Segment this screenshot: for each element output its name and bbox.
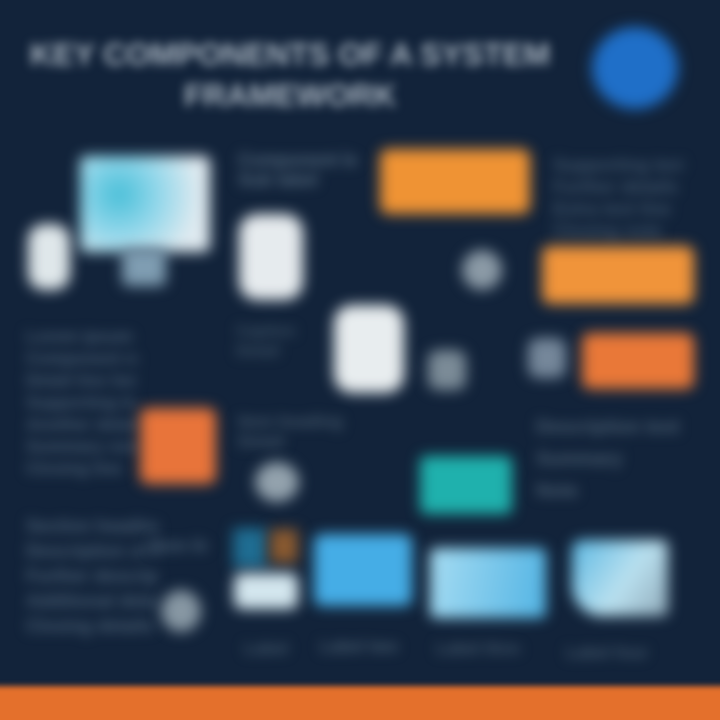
footer bar	[0, 686, 720, 720]
icon: white rounded device one	[239, 214, 303, 300]
small icon: grey dot four	[255, 462, 299, 502]
title	[24, 36, 556, 113]
caption one: Label	[244, 639, 288, 658]
text block: upper left: Another detail	[26, 415, 138, 434]
text block: lower left	[24, 516, 159, 638]
small icon: grey dot three	[528, 338, 566, 378]
small device	[28, 224, 70, 290]
text block: upper right: Extra text line	[553, 199, 671, 219]
icon: monitor	[16, 144, 222, 301]
captions: bottom row	[244, 637, 648, 662]
icon: blue screen three	[572, 540, 668, 616]
caption: device one	[236, 323, 296, 358]
text block: upper right: Closing note	[553, 221, 662, 241]
small icon: grey dot two	[428, 350, 466, 390]
text block: upper left	[25, 327, 138, 479]
text block: upper right: Supporting text	[553, 155, 683, 175]
orange button two	[542, 246, 694, 304]
text block: upper left: Closing line	[26, 459, 122, 478]
text block: middle: Detail	[238, 432, 284, 451]
text block: right: Note	[536, 481, 578, 502]
icon: multicolour tile	[223, 520, 308, 620]
text block: right: Summary	[536, 449, 623, 470]
small icon: grey dot one	[462, 250, 502, 290]
text block: upper right	[552, 155, 683, 241]
text block: lower left: Closing details	[26, 616, 154, 636]
icon: blue screen one	[314, 534, 412, 606]
icon: blue screen two	[430, 548, 546, 618]
text block: middle: Item heading	[238, 412, 343, 431]
orange button three	[582, 333, 694, 389]
text block: right: Description text	[536, 417, 680, 438]
title: KEY COMPONENTS OF A SYSTEM	[30, 36, 550, 72]
text block: right	[534, 417, 680, 502]
orange square	[140, 408, 216, 484]
monitor stand	[122, 248, 166, 286]
tile blue corner	[233, 528, 267, 568]
small icon: grey dot five	[161, 590, 201, 632]
monitor screen	[80, 156, 210, 252]
tile white base	[234, 573, 298, 609]
caption two: Label two	[320, 637, 398, 656]
caption: device one: Caption	[236, 323, 296, 340]
title: FRAMEWORK	[184, 77, 396, 113]
teal button	[420, 456, 512, 514]
text block: upper right: Further details	[553, 177, 678, 197]
heading: column two	[236, 150, 358, 190]
icon: blue circle	[592, 27, 678, 109]
text block: middle	[238, 412, 344, 451]
caption four: Label four	[566, 643, 648, 662]
tile orange corner	[270, 529, 298, 563]
icon: white rounded device two	[334, 305, 404, 393]
orange button one	[380, 149, 530, 214]
